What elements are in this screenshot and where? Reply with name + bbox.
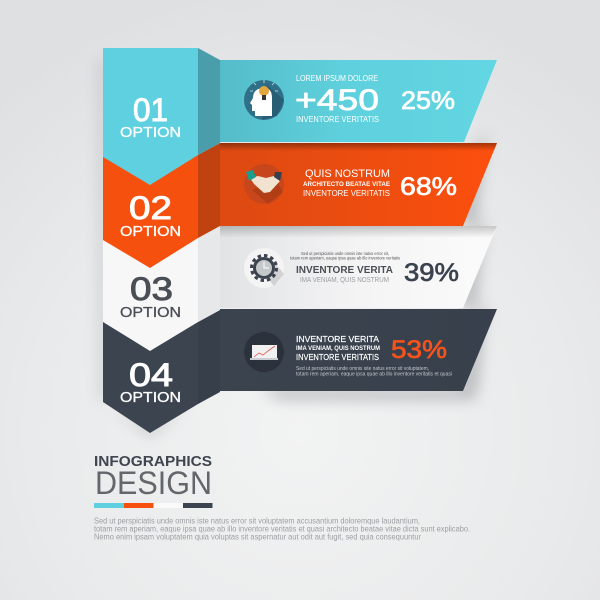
label option: OPTION bbox=[120, 125, 181, 141]
heading: infographics: INFOGRAPHICS bbox=[94, 454, 212, 470]
option 4: dark arrow bbox=[103, 310, 220, 433]
colour bar bbox=[94, 503, 212, 508]
text: small description: Sed ut perspiciatis unde omnis iste natus error sit voluptatem, bbox=[296, 366, 429, 372]
title bbox=[94, 454, 212, 501]
text: inventore veritatis: INVENTORE VERITATIS bbox=[303, 189, 390, 198]
body text: Nemo enim ipsam voluptatem quia voluptas sit aspernatur aut odit aut fugit, sed quia consequuntur bbox=[94, 532, 421, 542]
text: inventore veritatis: INVENTORE VERITATIS bbox=[296, 352, 379, 362]
label option: OPTION bbox=[120, 224, 181, 240]
panel 1: teal row bbox=[220, 60, 497, 142]
text: small description: totam rem aperiam, eaque ipsa quae ab illo inventore veritatis bbox=[290, 256, 401, 260]
body text: Sed ut perspiciatis unde omnis iste natus error sit voluptatem accusantium doloremque laudantium, bbox=[94, 516, 420, 526]
text: small description bbox=[290, 251, 401, 260]
icon: laptop with chart bbox=[244, 332, 284, 372]
stat: 39%: 39% bbox=[404, 259, 459, 287]
text: inventore verita: INVENTORE VERITA bbox=[296, 334, 379, 344]
heading: design: DESIGN bbox=[95, 465, 212, 501]
text: small description: totam rem aperiam, eaque ipsa quae ab illo inventore veritatis et quasi bbox=[296, 372, 452, 378]
text: quis nostrum: QUIS NOSTRUM bbox=[305, 168, 390, 180]
panel shadows bbox=[100, 60, 486, 436]
option 3: white arrow bbox=[103, 226, 220, 351]
text: small description: Sed ut perspiciatis unde omnis iste natus error sit, bbox=[301, 251, 389, 256]
banner shape bbox=[220, 309, 497, 391]
banner shape bbox=[220, 226, 497, 308]
number 03: 03 bbox=[130, 271, 173, 307]
panel 2: orange row bbox=[220, 143, 497, 226]
panel 3: white row bbox=[220, 226, 497, 308]
icon: handshake bbox=[244, 164, 284, 204]
text: ima veniam: IMA VENIAM, QUIS NOSTRUM bbox=[296, 345, 380, 352]
stat: 68%: 68% bbox=[400, 173, 457, 201]
icon: head with light bulb bbox=[244, 80, 284, 120]
text: ima veniam: IMA VENIAM, QUIS NOSTRUM bbox=[300, 277, 389, 284]
banner shape bbox=[220, 60, 497, 142]
number 04: 04 bbox=[129, 357, 173, 393]
number 02: 02 bbox=[129, 190, 172, 226]
stat: +450: +450 bbox=[295, 84, 379, 117]
body text bbox=[94, 516, 470, 542]
body text: totam rem aperiam, eaque ipsa quae ab illo inventore veritatis et quasi architecto beatae vitae dicta sunt explicabo. bbox=[94, 524, 470, 534]
text: small description bbox=[296, 366, 452, 378]
option 1: teal arrow bbox=[103, 48, 220, 185]
option 2: orange arrow bbox=[103, 143, 220, 268]
panel 4: dark row bbox=[220, 309, 497, 391]
banner shape bbox=[220, 143, 497, 226]
text: inventore veritatis: INVENTORE VERITATIS bbox=[296, 115, 379, 124]
text: architecto beatae vitae: ARCHITECTO BEATAE VITAE bbox=[303, 182, 390, 188]
number 01: 01 bbox=[133, 92, 168, 128]
stat: 25%: 25% bbox=[401, 87, 455, 115]
label option: OPTION bbox=[120, 305, 181, 321]
icon: gear with clock bbox=[244, 248, 284, 288]
text: lorem ipsum dolore: LOREM IPSUM DOLORE bbox=[296, 74, 378, 83]
text: inventore verita: INVENTORE VERITA bbox=[296, 264, 393, 276]
stat: 53%: 53% bbox=[391, 336, 447, 364]
label option: OPTION bbox=[120, 390, 181, 406]
